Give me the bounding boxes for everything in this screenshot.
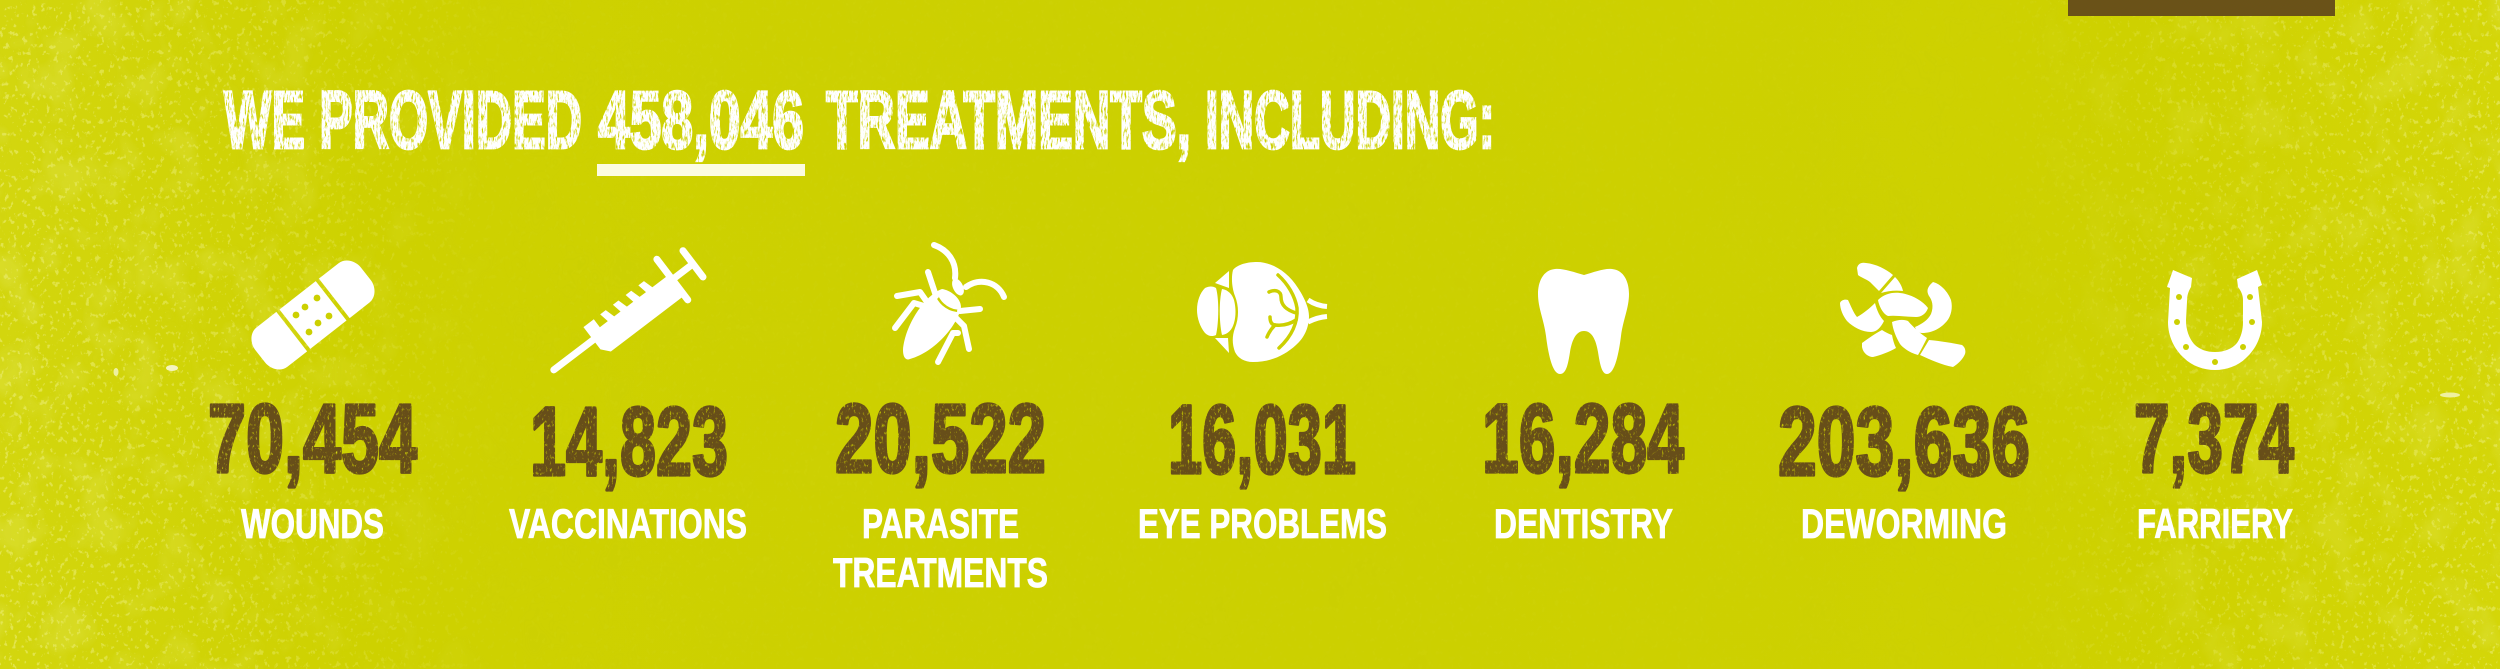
label: parasite treatments (833, 500, 1048, 596)
stat: farriery (2134, 270, 2294, 547)
number: 16,284: 16,284 (1482, 384, 1684, 493)
stat: deworming (1778, 263, 2030, 547)
label: vaccinations: VACCINATIONS (509, 500, 747, 547)
title: 458,046 (598, 75, 804, 166)
label: eye problems: EYE PROBLEMS (1138, 500, 1387, 547)
icon: syringe (533, 239, 713, 395)
number: 14,823: 14,823 (530, 387, 728, 496)
top bar (2068, 0, 2335, 16)
label: dentistry: DENTISTRY (1494, 500, 1673, 547)
icon: bug (895, 245, 1004, 362)
stat: eye problems (1138, 262, 1387, 547)
icon: tooth (1538, 269, 1629, 374)
title (224, 75, 1495, 176)
stat: parasite treatments (833, 245, 1048, 596)
number: 70,454: 70,454 (208, 384, 417, 493)
label: farriery: FARRIERY (2137, 500, 2293, 547)
label: parasite treatments: PARASITE (862, 500, 1019, 547)
title: TREATMENTS, (826, 75, 1191, 166)
label: deworming: DEWORMING (1801, 500, 2007, 547)
stat: dentistry (1482, 269, 1684, 547)
icon: eye (1197, 262, 1327, 362)
icon: horseshoe (2167, 270, 2262, 370)
label: wounds: WOUNDS (241, 500, 384, 547)
stat: vaccinations (509, 239, 747, 547)
number: 20,522: 20,522 (835, 384, 1046, 493)
icon: worms (1840, 263, 1965, 367)
label: parasite treatments: TREATMENTS (833, 549, 1048, 596)
number: 7,374: 7,374 (2134, 384, 2294, 493)
number: 203,636: 203,636 (1778, 387, 2030, 496)
title: WE PROVIDED (224, 75, 582, 166)
stat: wounds (208, 254, 417, 547)
number: 16,031: 16,031 (1168, 385, 1356, 494)
title: INCLUDING: (1205, 75, 1495, 166)
icon: bandage (245, 254, 381, 376)
